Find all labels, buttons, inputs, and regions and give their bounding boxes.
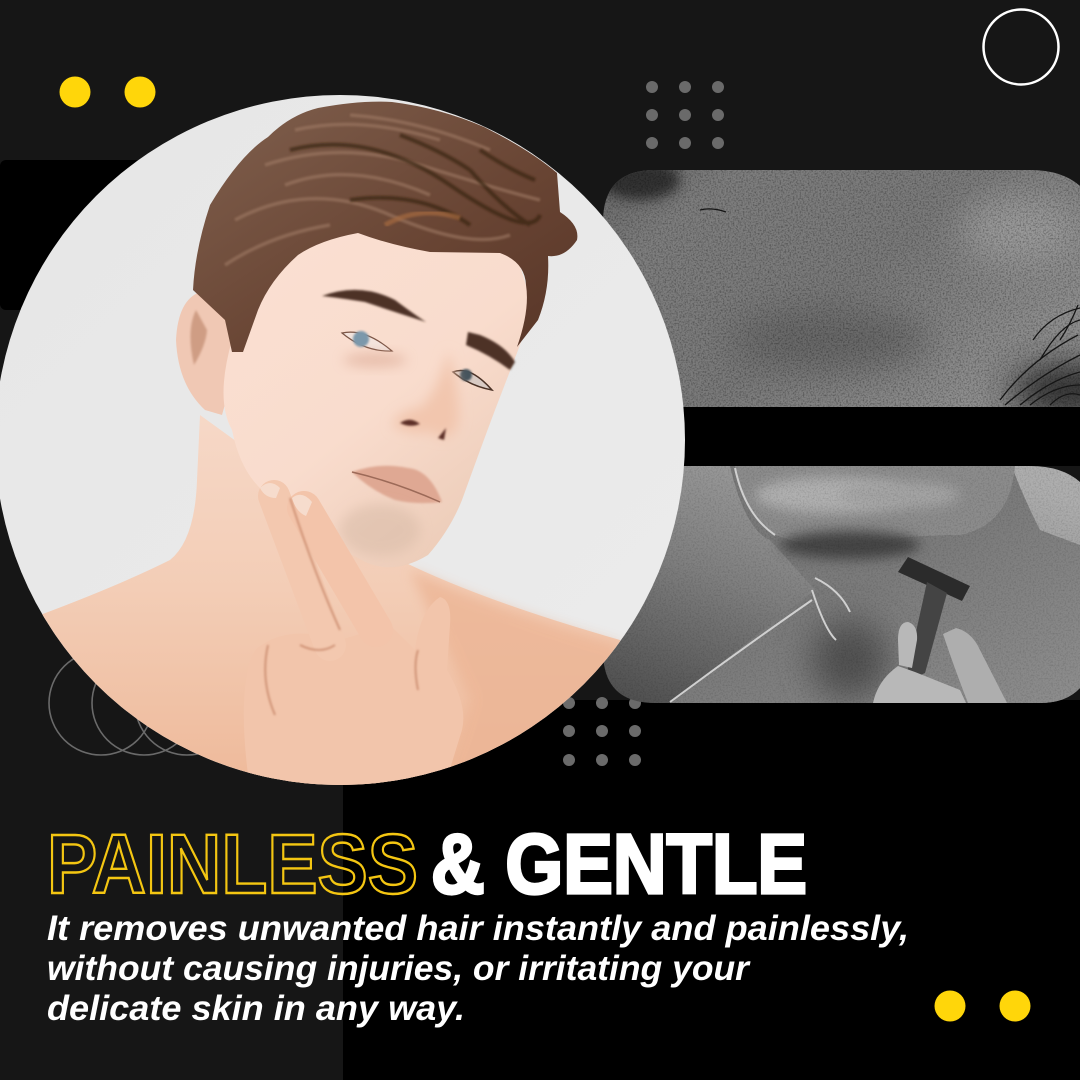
- decorative outlined circles: [49, 651, 239, 755]
- background panel: black lower block: [343, 700, 1080, 1080]
- chest shading right: [410, 570, 620, 790]
- iris left: [353, 331, 369, 347]
- body text: [47, 909, 909, 1028]
- index finger: [258, 480, 320, 578]
- ear: [176, 294, 230, 415]
- black band between photos: [640, 407, 1080, 466]
- nostrils: [400, 420, 446, 440]
- jaw: [735, 466, 1015, 545]
- hair warm highlight: [385, 213, 460, 225]
- iris right: [460, 369, 472, 381]
- hair: [193, 102, 577, 352]
- eye shadow: [343, 353, 407, 367]
- body text: It removes unwanted hair instantly and painlessly,: [47, 909, 909, 948]
- hand: [244, 483, 463, 790]
- eye left: [342, 332, 392, 351]
- finger lines: [265, 498, 418, 715]
- hair dark strands: [290, 135, 540, 225]
- background panel: black left band: [0, 160, 160, 310]
- hair highlights: [225, 115, 540, 265]
- eyebrows: [322, 290, 515, 370]
- decorative yellow dots bottom right: [934, 990, 1030, 1022]
- lips: [352, 466, 442, 503]
- decorative yellow dots top left: [60, 76, 156, 108]
- title: white words & GENTLE: & GENTLE: [431, 817, 807, 911]
- middle finger: [304, 508, 376, 630]
- eye right: [453, 370, 492, 390]
- chin stubble: [342, 505, 417, 554]
- decorative grey dot grid bottom: [563, 697, 641, 766]
- nose shading: [392, 350, 459, 437]
- razor: [873, 557, 1007, 703]
- photo: skin close-up: [600, 160, 1080, 415]
- decorative grey dot grid top: [646, 81, 724, 149]
- decorative white ring: [984, 10, 1058, 84]
- shoulders and chest: [42, 415, 620, 785]
- fingernails: [260, 483, 312, 516]
- shoulder and neck: [670, 466, 1080, 703]
- photo: man touching his jaw: [0, 90, 690, 800]
- body text: delicate skin in any way.: [47, 989, 465, 1028]
- hand holding razor: [873, 622, 966, 703]
- title: outlined word PAINLESS: PAINLESS: [47, 817, 418, 911]
- face: [224, 220, 528, 567]
- thumb: [943, 628, 1007, 703]
- body text: without causing injuries, or irritating your: [47, 949, 751, 988]
- photo: man shaving neck with razor: [603, 466, 1080, 703]
